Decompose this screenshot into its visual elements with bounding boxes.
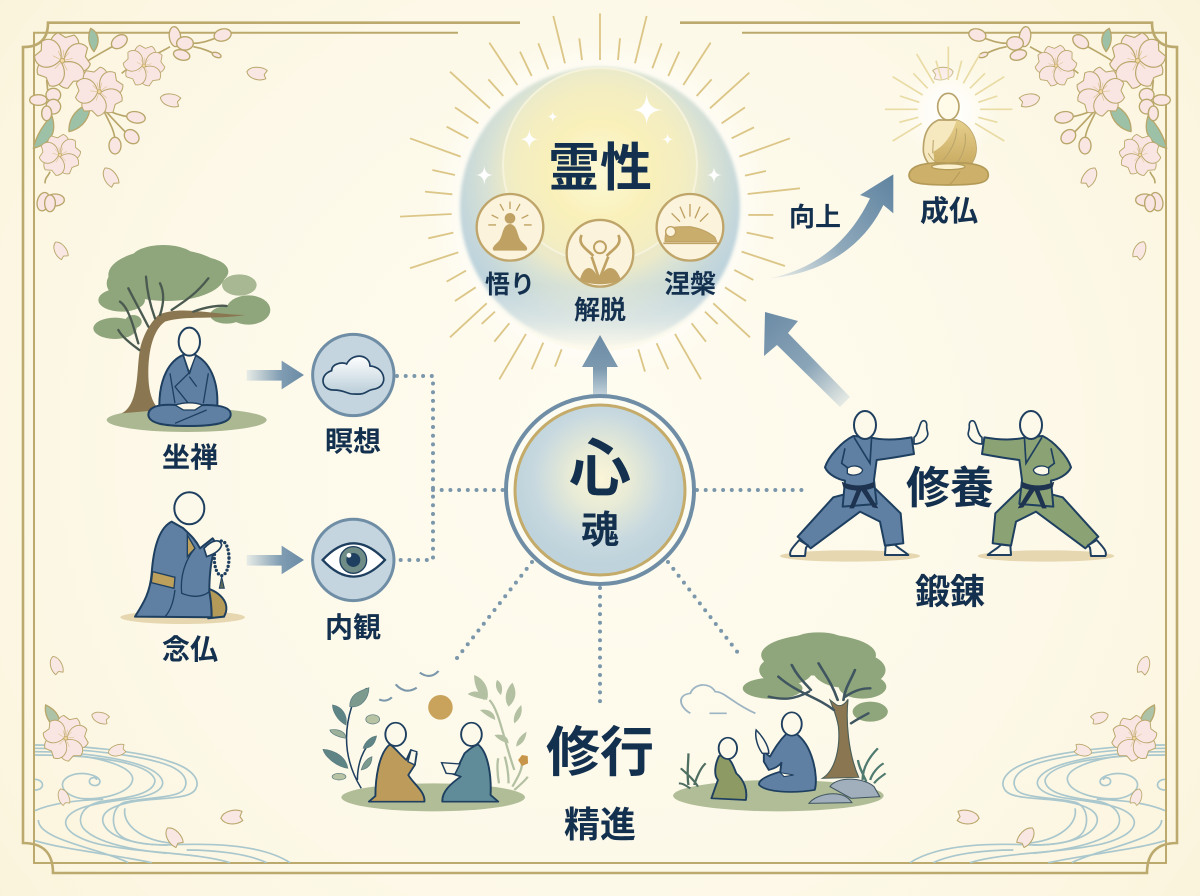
panel: spirituality sphere [400, 13, 800, 379]
arrow: curved upward [770, 174, 893, 278]
label: 成仏: 成仏 [920, 195, 978, 228]
panel: ascetic practice [323, 632, 888, 845]
arrow: nembutsu to introspection [247, 546, 304, 574]
panel: training (martial arts) [780, 411, 1114, 612]
ground shadows [780, 550, 1114, 562]
water waves: bottom left corner [35, 705, 290, 863]
icon: nirvana [657, 194, 723, 261]
dotted connectors [397, 376, 806, 705]
cherry blossoms: top left corner [28, 26, 268, 212]
label: 内観: 内観 [325, 612, 381, 643]
tree and zazen monk [93, 245, 270, 432]
loose petal right [1131, 239, 1149, 261]
inner ring [515, 405, 685, 575]
label: 解脱: 解脱 [574, 295, 626, 325]
fighter: blue [790, 411, 928, 556]
panel: buddhahood [885, 47, 1012, 228]
icon: eye [313, 519, 394, 601]
arrow: up from heart to sphere [582, 335, 618, 396]
sun rays [400, 13, 800, 379]
heading: 霊性: 霊性 [548, 140, 652, 198]
panel: left practices [93, 245, 394, 665]
loose petal lower right [1136, 655, 1153, 676]
panel: heart and soul circle [506, 396, 694, 584]
bottom fade [456, 63, 744, 351]
sparkles [475, 92, 723, 186]
heading: 修行: 修行 [546, 723, 654, 783]
sphere body [460, 67, 740, 347]
icon: satori [477, 194, 543, 261]
label: 魂: 魂 [581, 510, 619, 552]
label: 悟り: 悟り [485, 271, 535, 299]
arrow: zazen to meditation [247, 361, 304, 389]
cherry blossoms: top right corner [932, 26, 1172, 212]
arrow: training to sphere [764, 312, 850, 407]
heading: 修養: 修養 [906, 464, 994, 513]
label: 向上: 向上 [789, 202, 841, 232]
label: 鍛錬: 鍛錬 [915, 573, 985, 612]
loose petal lower left [48, 654, 65, 675]
icon: liberation [567, 220, 633, 287]
label: 涅槃: 涅槃 [664, 269, 716, 299]
circle [506, 396, 694, 584]
inner glow [503, 68, 697, 262]
water waves: bottom right corner [910, 705, 1165, 863]
nembutsu monk [120, 492, 245, 624]
loose petal left [51, 239, 70, 261]
icon: cloud [313, 334, 394, 416]
label: 坐禅: 坐禅 [162, 442, 218, 473]
buddha figure [885, 47, 1012, 185]
label: 精進: 精進 [564, 804, 636, 845]
scene: teacher and student under tree [673, 632, 888, 811]
fighter: green [968, 411, 1106, 556]
scene: two monks in nature [323, 671, 528, 811]
sphere halo [428, 35, 772, 379]
label: 瞑想: 瞑想 [325, 426, 381, 457]
label: 念仏: 念仏 [162, 634, 218, 665]
heading: 心: 心 [569, 435, 631, 504]
